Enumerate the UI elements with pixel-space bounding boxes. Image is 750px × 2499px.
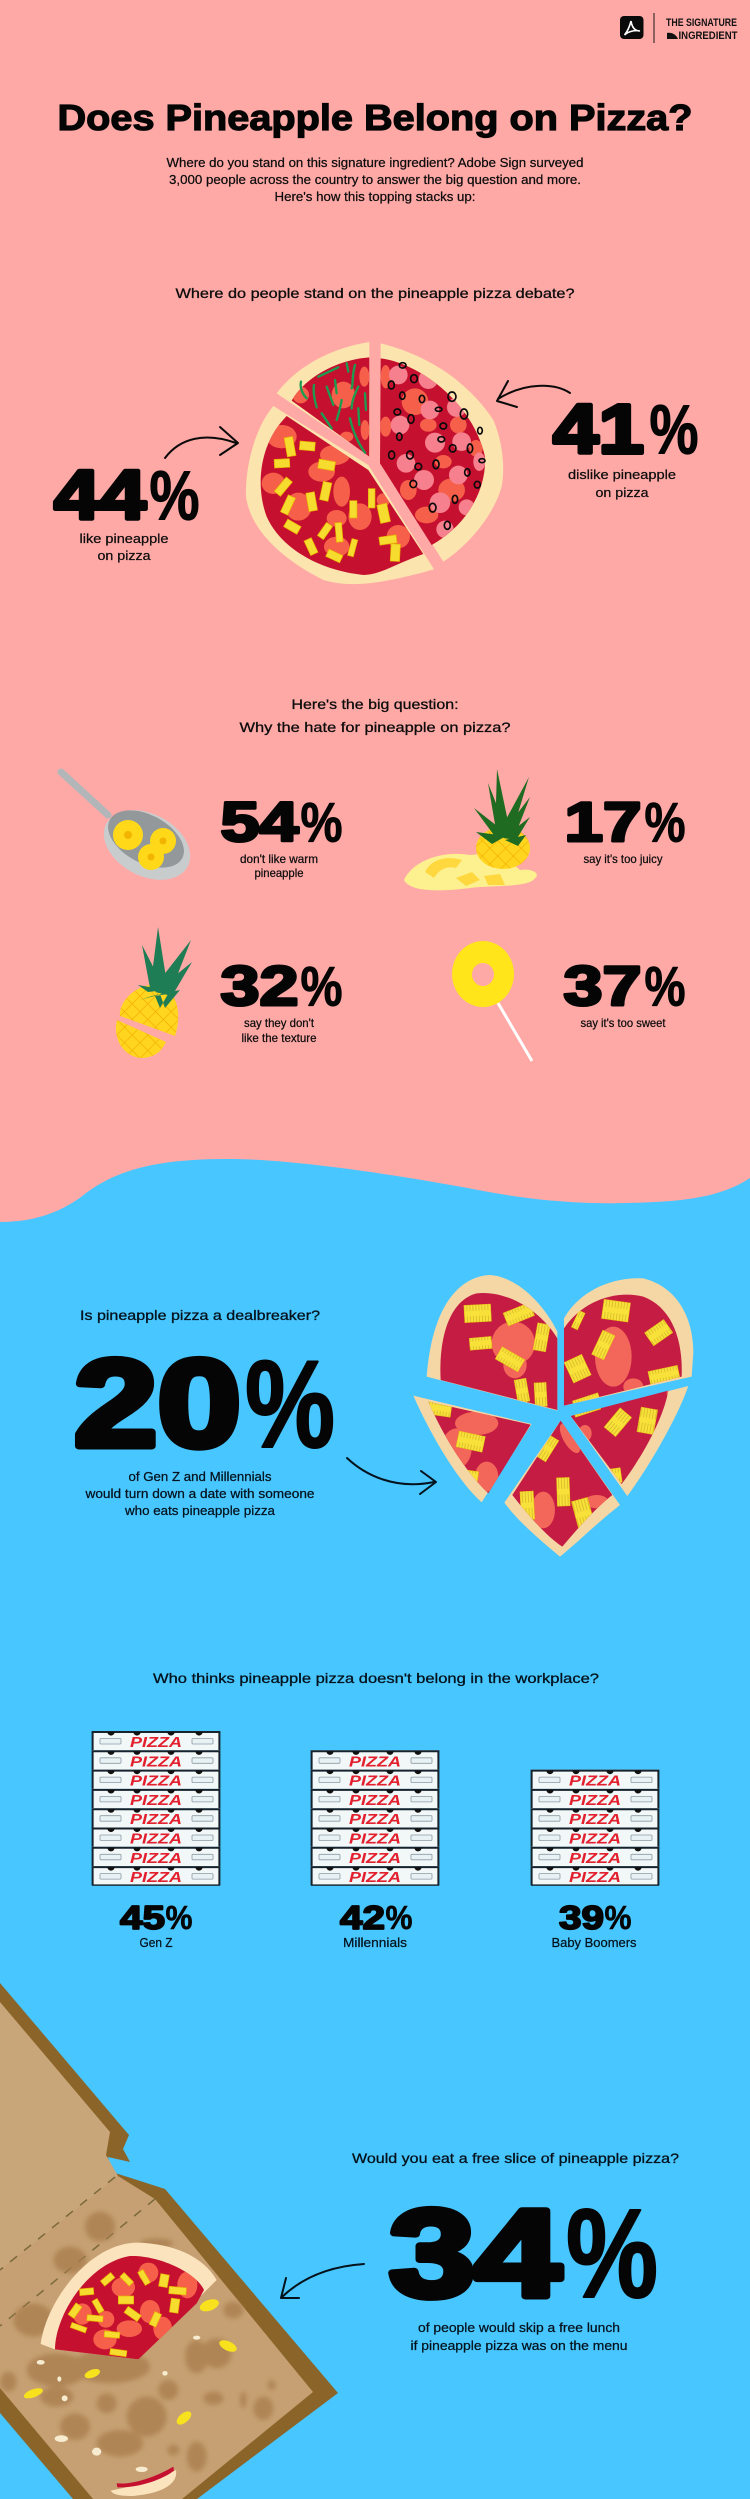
stat: 34% skip lunch: of people would skip a free lunch bbox=[418, 2320, 620, 2335]
heading: dealbreaker: Is pineapple pizza a dealbreaker? bbox=[80, 1307, 320, 1323]
stat: 45% Gen Z: 45 bbox=[120, 1899, 165, 1936]
stat: 44% like: % bbox=[150, 456, 200, 534]
intro text: 3,000 people across the country to answer the big question and more. bbox=[169, 172, 581, 187]
stat: 32% texture: % bbox=[300, 954, 342, 1018]
crust remnant bbox=[111, 2467, 176, 2496]
stat: 20% date: would turn down a date with someone bbox=[84, 1486, 314, 1501]
box: base cardboard bbox=[0, 2176, 313, 2499]
stat: 54% warm pineapple: % bbox=[300, 790, 342, 854]
stat: 32% texture: say they don't bbox=[244, 1016, 315, 1030]
stat: 32% texture bbox=[220, 954, 342, 1045]
stack: Baby Boomers pizza boxes: PIZZA bbox=[569, 1793, 621, 1809]
slice: pineapple bbox=[246, 406, 434, 584]
stat: 20% date: who eats pineapple pizza bbox=[124, 1503, 276, 1518]
stat: 20% date: 20 bbox=[74, 1335, 241, 1473]
stack: Millennials pizza boxes: PIZZA bbox=[349, 1832, 401, 1848]
stat: 17% juicy bbox=[564, 790, 686, 866]
stat: 45% Gen Z: % bbox=[166, 1899, 192, 1936]
intro text: Here's how this topping stacks up: bbox=[274, 189, 476, 204]
background: blue wave section bbox=[0, 1159, 750, 2499]
stat: 39% Baby Boomers: 39 bbox=[559, 1899, 604, 1936]
stat: 54% warm pineapple: don't like warm bbox=[240, 852, 318, 866]
stat: 42% Millennials: Millennials bbox=[343, 1935, 408, 1950]
stat: 34% skip lunch: 34 bbox=[389, 2185, 561, 2323]
icon: pizza pie chart bbox=[246, 342, 503, 584]
stack: Gen Z pizza boxes: PIZZA bbox=[130, 1870, 182, 1886]
stat: 37% sweet: % bbox=[644, 954, 686, 1018]
stat: 17% juicy: 17 bbox=[564, 790, 642, 853]
arrow: 34% to box bbox=[281, 2264, 364, 2298]
stat: 20% date: % bbox=[245, 1336, 335, 1474]
stack: Millennials pizza boxes: PIZZA bbox=[349, 1812, 401, 1828]
slice: upper left bbox=[427, 1275, 557, 1411]
stat: 41% dislike: 41 bbox=[553, 390, 644, 468]
stack: Baby Boomers pizza boxes: PIZZA bbox=[569, 1832, 621, 1848]
illustration: open pizza box with leftover slice bbox=[0, 1983, 338, 2499]
stat: 32% texture: 32 bbox=[220, 954, 298, 1017]
heading: why the hate bbox=[240, 696, 511, 735]
icon: pineapple lollipop bbox=[452, 941, 532, 1061]
stack: Millennials pizza boxes: PIZZA bbox=[349, 1774, 401, 1790]
slice: upper right bbox=[564, 1278, 693, 1411]
slice: herb bbox=[277, 342, 370, 457]
stat: 39% Baby Boomers bbox=[552, 1899, 637, 1950]
stack: Gen Z pizza boxes: PIZZA bbox=[130, 1793, 182, 1809]
stack: Baby Boomers pizza boxes: PIZZA bbox=[569, 1812, 621, 1828]
arrow: 41% to pizza bbox=[497, 381, 570, 407]
stat: 42% Millennials: 42 bbox=[340, 1899, 385, 1936]
box: outer edge bbox=[0, 1983, 338, 2499]
icon: heart-shaped pizza bbox=[413, 1275, 693, 1557]
title: Does Pineapple Belong on Pizza? bbox=[58, 97, 692, 138]
stack: Gen Z pizza boxes bbox=[92, 1731, 220, 1886]
stat: 54% warm pineapple bbox=[220, 790, 342, 880]
stat: 34% skip lunch bbox=[389, 2183, 658, 2353]
stat: 44% like: 44 bbox=[54, 456, 146, 534]
stat: 44% like: like pineapple bbox=[80, 531, 168, 546]
icon: juicy pineapple with puddle bbox=[404, 769, 537, 890]
stack: Gen Z pizza boxes: PIZZA bbox=[130, 1754, 182, 1770]
stack: Gen Z pizza boxes: PIZZA bbox=[130, 1832, 182, 1848]
stat: 32% texture: like the texture bbox=[242, 1031, 317, 1045]
stat: 37% sweet: 37 bbox=[564, 954, 642, 1017]
stains bbox=[0, 2212, 276, 2472]
box: fold lines bbox=[0, 2177, 155, 2326]
stat: 39% Baby Boomers: Baby Boomers bbox=[552, 1935, 637, 1950]
logo: Adobe and The Signature Ingredient bbox=[620, 13, 738, 43]
slice: bottom bbox=[504, 1421, 620, 1557]
stat: 45% Gen Z: Gen Z bbox=[140, 1935, 173, 1950]
arrow: 20% to heart bbox=[347, 1458, 436, 1494]
icon: sliced pineapple bbox=[116, 927, 192, 1058]
stat: 34% skip lunch: if pineapple pizza was on the menu bbox=[410, 2338, 628, 2353]
stack: Gen Z pizza boxes: PIZZA bbox=[130, 1851, 182, 1867]
stack: Gen Z pizza boxes: PIZZA bbox=[130, 1812, 182, 1828]
heading: why the hate: Why the hate for pineapple on pizza? bbox=[240, 719, 511, 735]
stack: Gen Z pizza boxes: PIZZA bbox=[130, 1774, 182, 1790]
stat: 20% date bbox=[74, 1335, 335, 1518]
stack: Millennials pizza boxes bbox=[311, 1750, 439, 1886]
icon: frying pan with pineapple rings bbox=[61, 772, 202, 894]
slice: left bbox=[413, 1396, 532, 1502]
stack: Millennials pizza boxes: PIZZA bbox=[349, 1754, 401, 1770]
stat: 54% warm pineapple: 54 bbox=[220, 790, 298, 853]
stat: 45% Gen Z bbox=[120, 1899, 192, 1950]
intro text bbox=[166, 155, 584, 204]
stack: Baby Boomers pizza boxes: PIZZA bbox=[569, 1851, 621, 1867]
heading: why the hate: Here's the big question: bbox=[292, 696, 458, 712]
intro text: Where do you stand on this signature ingredient? Adobe Sign surveyed bbox=[166, 155, 584, 170]
heading: workplace: Who thinks pineapple pizza doesn't belong in the workplace? bbox=[153, 1670, 599, 1686]
stat: 17% juicy: say it's too juicy bbox=[584, 852, 662, 866]
stat: 37% sweet bbox=[564, 954, 686, 1030]
heading: free slice: Would you eat a free slice of pineapple pizza? bbox=[352, 2150, 679, 2166]
stat: 41% dislike: % bbox=[650, 390, 698, 468]
stack: Millennials pizza boxes: PIZZA bbox=[349, 1851, 401, 1867]
stat: 17% juicy: % bbox=[644, 790, 686, 854]
stack: Baby Boomers pizza boxes: PIZZA bbox=[569, 1774, 621, 1790]
stack: Baby Boomers pizza boxes bbox=[531, 1770, 659, 1886]
slice: pepperoni and olive bbox=[380, 343, 503, 562]
loose pineapple pieces and crumbs bbox=[23, 2297, 238, 2472]
stat: 42% Millennials: % bbox=[386, 1899, 412, 1936]
logo: Adobe and The Signature Ingredient: INGREDIENT bbox=[678, 30, 738, 42]
stat: 37% sweet: say it's too sweet bbox=[580, 1016, 666, 1030]
stat: 42% Millennials bbox=[340, 1899, 412, 1950]
stack: Millennials pizza boxes: PIZZA bbox=[349, 1870, 401, 1886]
box: grease stains and slice bbox=[0, 2212, 276, 2496]
stack: Gen Z pizza boxes: PIZZA bbox=[130, 1735, 182, 1751]
stat: 20% date: of Gen Z and Millennials bbox=[128, 1469, 272, 1484]
stat: 41% dislike: on pizza bbox=[596, 485, 649, 500]
stack: Millennials pizza boxes: PIZZA bbox=[349, 1793, 401, 1809]
arrow: 44% to pizza bbox=[165, 427, 238, 458]
stat: 54% warm pineapple: pineapple bbox=[254, 866, 304, 880]
stat: 41% dislike bbox=[553, 390, 698, 500]
slice: pineapple leftover bbox=[41, 2243, 217, 2359]
heading: pizza debate: Where do people stand on the pineapple pizza debate? bbox=[176, 285, 575, 301]
stat: 44% like: on pizza bbox=[98, 548, 151, 563]
stat: 34% skip lunch: % bbox=[566, 2183, 658, 2324]
slice: lower right bbox=[571, 1386, 688, 1496]
stack: Baby Boomers pizza boxes: PIZZA bbox=[569, 1870, 621, 1886]
stat: 39% Baby Boomers: % bbox=[604, 1899, 632, 1936]
box: lid cardboard bbox=[0, 2002, 118, 2272]
stat: 41% dislike: dislike pineapple bbox=[568, 467, 676, 482]
stat: 44% like bbox=[54, 456, 200, 563]
